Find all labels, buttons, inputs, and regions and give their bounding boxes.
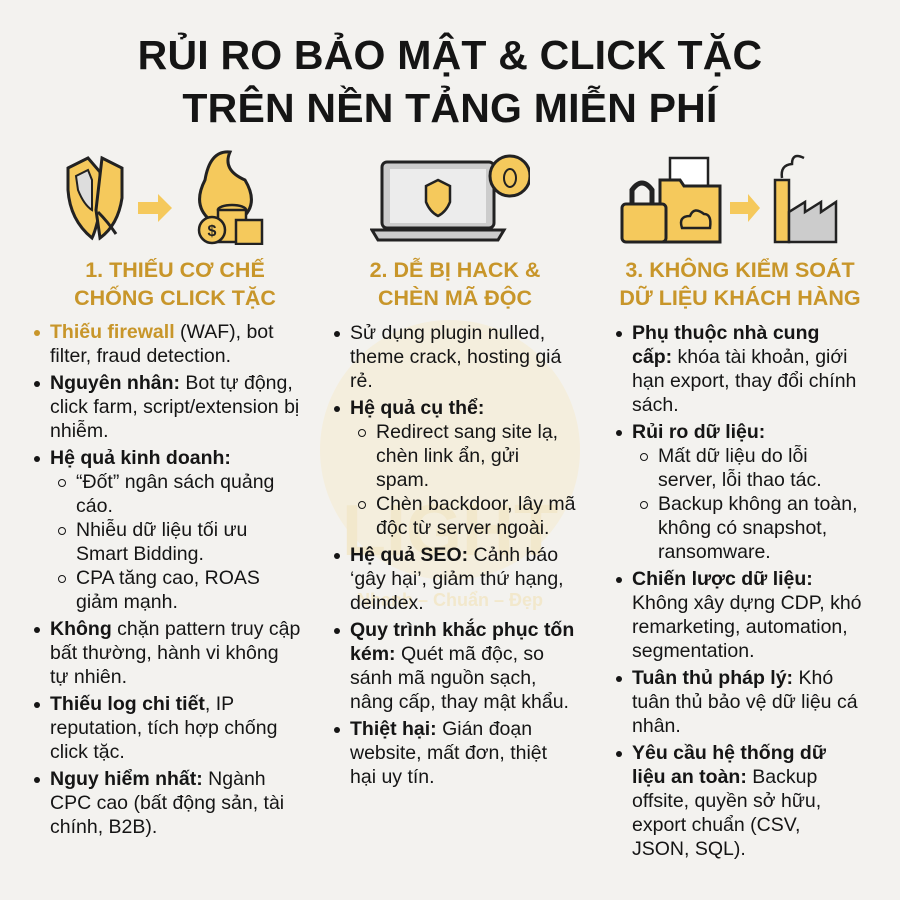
heading 2: CHÈN MÃ ĐỘC (378, 286, 532, 310)
column 2 text (334, 322, 576, 788)
column 1 text: Thiếu firewall (WAF), bot filter, fraud detection. (50, 321, 274, 367)
heading 1: CHỐNG CLICK TẶC (74, 286, 276, 310)
heading 3 (619, 258, 861, 310)
column 3 text: Chiến lược dữ liệu: Không xây dựng CDP, khó remarketing, automation, segmentation. (632, 568, 862, 662)
column 3 text: Backup không an toàn, không có snapshot, ransomware. (658, 493, 858, 563)
watermark: Nhanh – Chuẩn – Đẹp (357, 590, 543, 610)
column 3 text: Rủi ro dữ liệu: (632, 421, 765, 443)
column 2 text: Hệ quả SEO: Cảnh báo ‘gây hại’, giảm thứ hạng, deindex. (350, 544, 564, 614)
column 2 text: Chèn backdoor, lây mã độc từ server ngoài. (376, 493, 575, 539)
column 1 text: Nguyên nhân: Bot tự động, click farm, script/extension bị nhiễm. (50, 372, 299, 442)
column 1 text (34, 321, 300, 838)
column 1 text: Nguy hiểm nhất: Ngành CPC cao (bất động sản, tài chính, B2B). (50, 768, 284, 838)
title (138, 32, 762, 131)
column 3 text: Yêu cầu hệ thống dữ liệu an toàn: Backup offsite, quyền sở hữu, export chuẩn (CSV, JSON, SQL). (632, 742, 826, 860)
column 3 text (616, 322, 862, 860)
heading 2: 2. DỄ BỊ HACK & (370, 258, 540, 282)
column 2 text: Hệ quả cụ thể: (350, 397, 484, 419)
column 3 text: Mất dữ liệu do lỗi server, lỗi thao tác. (658, 445, 822, 491)
column 1 text: Thiếu log chi tiết, IP reputation, tích hợp chống click tặc. (50, 693, 277, 763)
heading 1: 1. THIẾU CƠ CHẾ (85, 258, 265, 282)
column 2 text: Sử dụng plugin nulled, theme crack, hosting giá rẻ. (350, 322, 561, 392)
icon: hacked laptop (370, 154, 530, 242)
title: RỦI RO BẢO MẬT & CLICK TẶC (138, 32, 762, 78)
column 3 text: Tuân thủ pháp lý: Khó tuân thủ bảo vệ dữ liệu cá nhân. (632, 667, 858, 737)
title: TRÊN NỀN TẢNG MIỄN PHÍ (182, 85, 718, 131)
watermark (320, 320, 580, 610)
icon group 3: locked folder to factory (620, 154, 838, 244)
column 1 text: Hệ quả kinh doanh: (50, 447, 231, 469)
column 1 text: Nhiễu dữ liệu tối ưu Smart Bidding. (76, 519, 247, 565)
heading 3: DỮ LIỆU KHÁCH HÀNG (619, 286, 861, 310)
column 2 text: Quy trình khắc phục tốn kém: Quét mã độc, so sánh mã nguồn sạch, nâng cấp, thay mật khẩu. (350, 619, 574, 713)
icon group 1: broken shield to burning coins (66, 150, 264, 245)
column 3 text: Phụ thuộc nhà cung cấp: khóa tài khoản, giới hạn export, thay đổi chính sách. (632, 322, 856, 416)
column 1 text: CPA tăng cao, ROAS giảm mạnh. (76, 567, 260, 613)
column 1 text: “Đốt” ngân sách quảng cáo. (76, 471, 274, 517)
heading 3: 3. KHÔNG KIỂM SOÁT (625, 258, 855, 282)
icon group 1: broken shield to burning coins: $ (208, 223, 217, 240)
heading 2 (370, 258, 540, 310)
column 2 text: Thiệt hại: Gián đoạn website, mất đơn, thiệt hại uy tín. (350, 718, 547, 788)
heading 1 (74, 258, 276, 310)
column 1 text: Không chặn pattern truy cập bất thường, hành vi không tự nhiên. (50, 618, 300, 688)
watermark: LIGHT (342, 491, 558, 571)
column 2 text: Redirect sang site lạ, chèn link ẩn, gửi spam. (376, 421, 558, 491)
